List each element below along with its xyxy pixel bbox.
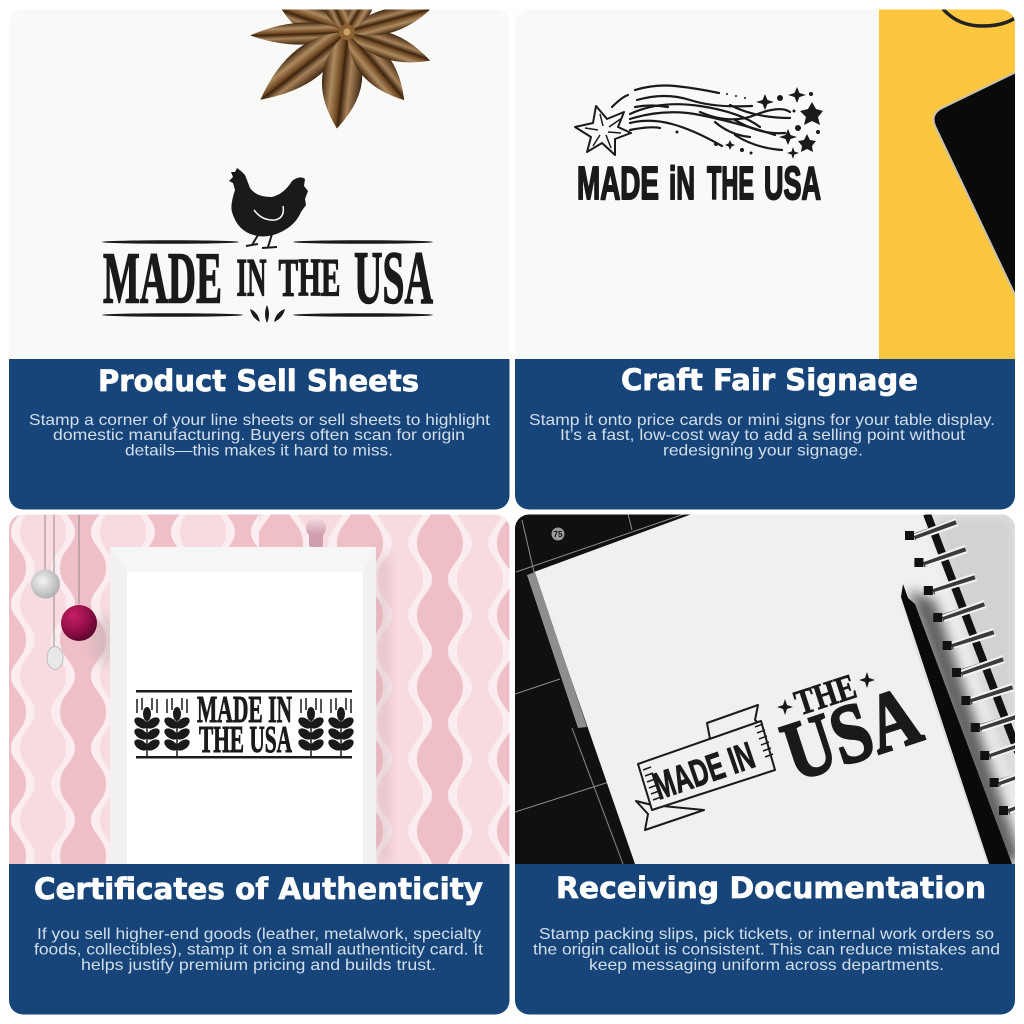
panel: product sell sheets — [9, 0, 510, 510]
icon: pen — [901, 584, 1012, 864]
stamp lettering: MADE IN — [197, 689, 292, 731]
body text: domestic manufacturing. Buyers often scan for origin — [53, 427, 465, 444]
stamp: ribbon made in the usa — [636, 666, 932, 830]
notebook paper — [534, 514, 1015, 864]
ornament shadow — [90, 614, 110, 666]
body text — [533, 926, 1000, 974]
icon: star anise — [250, 10, 430, 128]
photo background: yellow desk — [879, 10, 1015, 360]
caption band — [9, 359, 510, 510]
ribbon — [636, 705, 775, 830]
stamp: made in the usa — [102, 237, 433, 323]
usa lettering: USA — [772, 668, 932, 799]
icon: cable — [943, 9, 1015, 26]
spiral binding — [905, 514, 1023, 815]
white picture frame — [110, 547, 376, 867]
panel: craft fair signage — [515, 9, 1016, 510]
body text: details—this makes it hard to miss. — [125, 442, 393, 460]
stamp: wheat made in the usa — [132, 689, 356, 761]
stamp: shooting star: iN — [669, 157, 695, 209]
stamp lettering: THE USA — [199, 719, 292, 761]
photo background: black cutting mat — [515, 512, 1015, 864]
photo background: pink wallpaper — [9, 514, 510, 864]
body text: It’s a fast, low-cost way to add a selling point without — [560, 427, 966, 444]
body text — [34, 926, 484, 974]
stamp: shooting star — [575, 86, 823, 209]
panel: receiving documentation — [515, 512, 1023, 1015]
stars — [777, 672, 875, 715]
heading: Receiving Documentation — [556, 871, 986, 905]
stamp lettering — [197, 696, 292, 753]
ribbon lettering: MADE IN — [648, 735, 760, 808]
stamp: shooting star: MADE — [577, 157, 659, 209]
frame shadow — [376, 555, 390, 865]
heading: Certificates of Authenticity — [34, 872, 483, 906]
pen shadow — [908, 590, 1022, 864]
caption band — [515, 359, 1015, 510]
heading: Craft Fair Signage — [621, 363, 918, 397]
icon: chicken — [229, 168, 308, 248]
icon: hanging ornaments — [31, 515, 97, 670]
stamp: shooting star: USA — [764, 157, 821, 209]
caption band — [9, 864, 510, 1015]
photo background: white paper — [9, 10, 510, 360]
body text — [30, 414, 490, 456]
stamp: made in the usa: MADE — [103, 238, 222, 318]
the lettering: THE — [790, 666, 861, 723]
heading: Product Sell Sheets — [98, 364, 419, 398]
body text: redesigning your signage. — [663, 442, 863, 460]
icon: tablet — [934, 72, 1016, 297]
stamp: shooting star: THE — [707, 157, 754, 209]
stamp: made in the usa: IN — [236, 248, 266, 308]
mat number 75 — [552, 528, 564, 540]
body text: the origin callout is consistent. This can reduce mistakes and — [533, 942, 1000, 958]
body text: foods, collectibles), stamp it on a small authenticity card. It — [34, 942, 484, 958]
photo background: paper — [515, 10, 880, 360]
panel: certificates of authenticity — [9, 514, 510, 1015]
body text: If you sell higher-end goods (leather, metalwork, specialty — [37, 926, 481, 943]
paper clip tab — [527, 572, 587, 728]
body text: keep messaging uniform across departments. — [589, 957, 944, 974]
body text — [529, 412, 995, 460]
mat number 75: 75 — [554, 530, 563, 539]
icon: pink knob — [306, 518, 326, 547]
body text: Stamp it onto price cards or mini signs for your table display. — [529, 412, 995, 429]
stamp: made in the usa: USA — [354, 237, 433, 320]
stamp: made in the usa: THE — [278, 248, 340, 308]
body text: Stamp a corner of your line sheets or sell sheets to highlight — [29, 412, 491, 429]
caption band — [515, 864, 1015, 1015]
wheat icons — [132, 698, 356, 757]
body text: helps justify premium pricing and builds trust. — [81, 957, 436, 974]
notebook page shading — [930, 514, 1016, 800]
body text: Stamp packing slips, pick tickets, or internal work orders so — [539, 926, 994, 943]
